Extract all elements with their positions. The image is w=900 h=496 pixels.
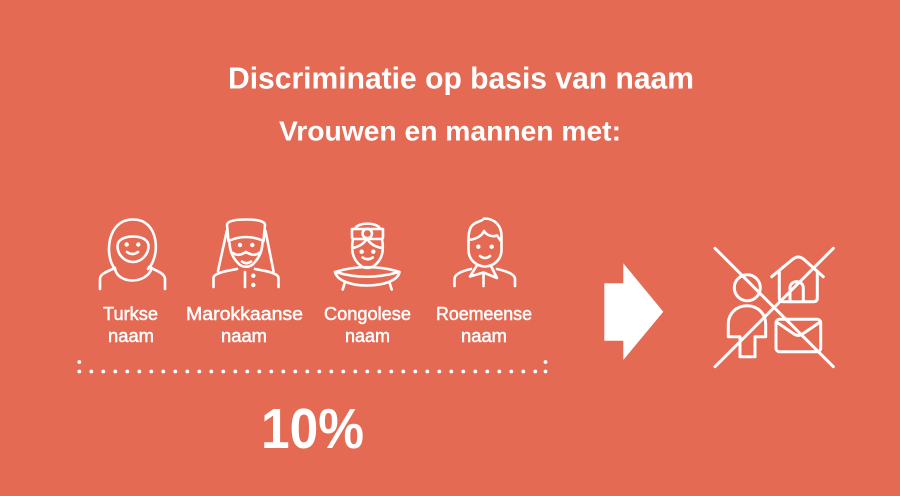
- label: Congolese naam: naam: [345, 325, 390, 346]
- label: Congolese naam: [324, 303, 411, 346]
- icon: house: [772, 257, 823, 302]
- group: Marokkaanse naam: [186, 220, 303, 346]
- icon: envelope: [776, 319, 821, 352]
- label: Congolese naam: Congolese: [324, 303, 411, 324]
- label: Roemeense naam: Roemeense: [436, 303, 532, 324]
- icon: man with fez and beard: [214, 220, 278, 287]
- crossing lines: [715, 248, 833, 367]
- subtitle: Vrouwen en mannen met:: [279, 116, 621, 146]
- label: Marokkaanse naam: naam: [221, 325, 267, 346]
- title: Discriminatie op basis van naam: [228, 60, 694, 96]
- icon: person: [728, 275, 766, 357]
- percentage: 10%: 10%: [261, 397, 364, 461]
- icon: woman with head wrap: [335, 224, 400, 290]
- label: Roemeense naam: [436, 303, 532, 346]
- group: Congolese naam: [324, 224, 411, 346]
- arrow: [604, 263, 663, 360]
- label: Roemeense naam: naam: [461, 325, 507, 346]
- icon: man with collar: [454, 218, 515, 286]
- icon: woman with headscarf: [100, 219, 165, 289]
- label: Marokkaanse naam: [186, 303, 303, 346]
- label: Turkse naam: Turkse: [103, 303, 158, 324]
- dotted bracket: [77, 360, 547, 373]
- label: Turkse naam: [103, 303, 158, 346]
- group: Turkse naam: [100, 219, 165, 346]
- label: Marokkaanse naam: Marokkaanse: [186, 303, 303, 324]
- group: Roemeense naam: [436, 218, 532, 346]
- label: Turkse naam: naam: [108, 325, 154, 346]
- icon: crossed out person, house and mail: [715, 248, 833, 367]
